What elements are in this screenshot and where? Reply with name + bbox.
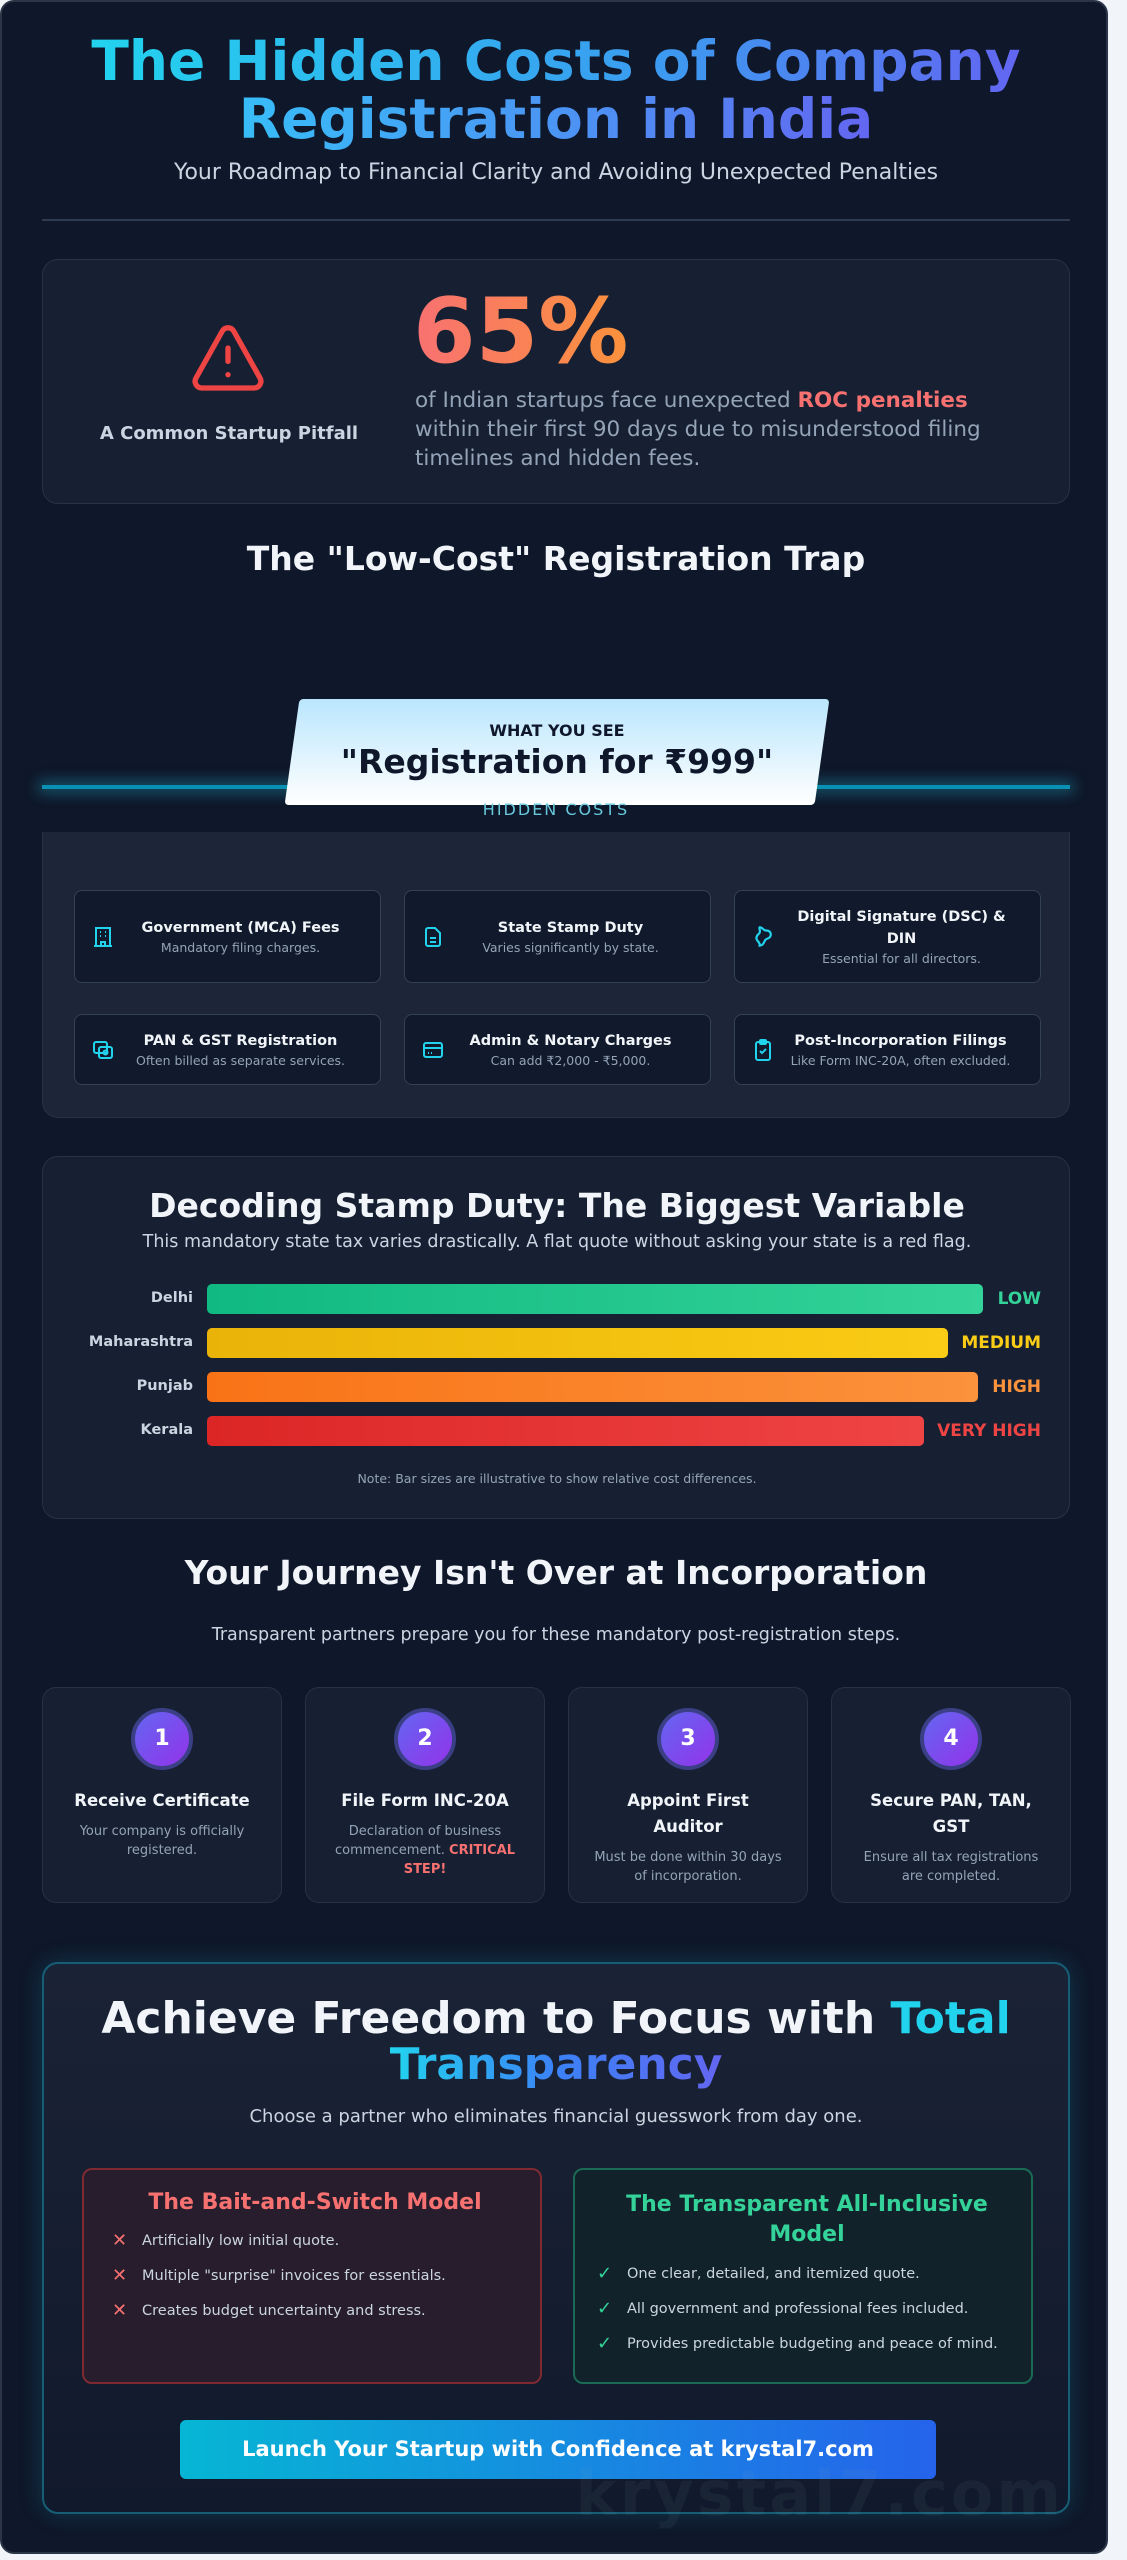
card: DSC & DIN: DIN <box>887 930 916 946</box>
subtitle: Choose a partner who eliminates financial guesswork from day one. <box>249 2106 863 2127</box>
stat number: 65% <box>413 279 628 384</box>
step 3: Appoint First Auditor <box>627 1791 749 1836</box>
box: bait and switch: The Bait-and-Switch Model <box>148 2190 482 2215</box>
stat label: A Common Startup Pitfall <box>100 423 358 444</box>
box: bait and switch: Creates budget uncertainty and stress. <box>142 2303 426 2319</box>
card: stamp duty: State Stamp Duty <box>498 920 643 936</box>
step 3: Must be done within 30 days of incorporation. <box>594 1850 782 1884</box>
box: transparent model: The Transparent All-Inclusive <box>626 2192 988 2217</box>
panel: hidden costs <box>42 832 1070 1118</box>
card: admin & notary: Can add ₹2,000 - ₹5,000. <box>491 1052 650 1068</box>
box: bait and switch <box>82 2168 542 2384</box>
box: transparent model: ✓ <box>597 2333 612 2354</box>
heading: low-cost trap: The "Low-Cost" Registration Trap <box>247 539 865 578</box>
bar chart: HIGH <box>992 1377 1041 1397</box>
step 4: Secure PAN, TAN, GST <box>870 1791 1032 1836</box>
title: Registration in India <box>239 87 873 151</box>
step 4 <box>831 1687 1071 1903</box>
step 1 <box>42 1687 282 1903</box>
bar chart: MEDIUM <box>961 1333 1041 1353</box>
step 2: File Form INC-20A <box>341 1791 509 1810</box>
card: DSC & DIN: Essential for all directors. <box>822 950 981 966</box>
card: admin & notary: Admin & Notary Charges <box>470 1032 671 1048</box>
card: DSC & DIN <box>734 890 1041 983</box>
label: hidden costs: HIDDEN COSTS <box>483 800 629 819</box>
card: stamp duty: Varies significantly by state. <box>482 940 659 954</box>
box: transparent model <box>573 2168 1033 2384</box>
main card frame: "Registration for ₹999" <box>341 742 773 781</box>
stat description: of Indian startups face unexpected ROC penalties within their first 90 days due to misunderstood filing timelines and hidden fees. <box>415 388 981 471</box>
subtitle: Your Roadmap to Financial Clarity and Avoiding Unexpected Penalties <box>174 160 938 185</box>
box: bait and switch: ✕ <box>112 2265 127 2286</box>
main card frame: WHAT YOU SEE <box>489 721 625 740</box>
card: PAN & GST: Often billed as separate services. <box>136 1052 345 1068</box>
box: bait and switch: Multiple "surprise" invoices for essentials. <box>142 2268 446 2284</box>
step 2: Declaration of business commencement. CRITICAL STEP! <box>335 1824 515 1877</box>
callout: what you see <box>285 699 829 805</box>
bar chart: VERY HIGH <box>937 1421 1041 1441</box>
bar chart <box>89 1284 1041 1446</box>
heading: journey: Your Journey Isn't Over at Incorporation <box>185 1553 927 1592</box>
box: transparent model: ✓ <box>597 2263 612 2284</box>
card: stamp duty <box>404 890 711 983</box>
subtitle: This mandatory state tax varies drastically. A flat quote without asking your state is a red flag. <box>143 1232 971 1252</box>
heading <box>101 1993 1011 2090</box>
bar chart: Punjab <box>137 1378 193 1394</box>
heading: Achieve Freedom to Focus with Total <box>101 1993 1011 2044</box>
title: The Hidden Costs of Company <box>91 29 1021 93</box>
heading: Transparency <box>390 2039 722 2090</box>
step 4: 4 <box>943 1726 959 1751</box>
bar chart: LOW <box>998 1289 1041 1309</box>
card: MCA fees: Government (MCA) Fees <box>141 920 340 936</box>
box: bait and switch: ✕ <box>112 2230 127 2251</box>
bar chart: Kerala <box>140 1422 193 1438</box>
bar chart: Delhi <box>151 1290 193 1306</box>
bar chart: Maharashtra <box>89 1334 193 1350</box>
card: post-incorporation: Post-Incorporation Filings <box>794 1032 1007 1048</box>
box: transparent model: Model <box>769 2222 845 2247</box>
glow line <box>42 785 1070 789</box>
box: transparent model: ✓ <box>597 2298 612 2319</box>
step 4: Ensure all tax registrations are completed. <box>864 1850 1038 1884</box>
card: PAN & GST <box>74 1014 381 1085</box>
box: transparent model: All government and professional fees included. <box>627 2301 968 2317</box>
box: transparent model: One clear, detailed, and itemized quote. <box>627 2266 920 2282</box>
panel: stat <box>42 259 1070 504</box>
button: CTA: Launch Your Startup with Confidence at krystal7.com <box>242 2437 874 2461</box>
step 1: 1 <box>154 1726 170 1751</box>
panel: stamp duty <box>42 1156 1070 1519</box>
note: Note: Bar sizes are illustrative to show relative cost differences. <box>357 1471 757 1486</box>
panel: total transparency <box>42 1962 1070 2514</box>
heading: Decoding Stamp Duty: The Biggest Variable <box>149 1186 965 1225</box>
step 1: Receive Certificate <box>74 1791 250 1810</box>
box: bait and switch: ✕ <box>112 2300 127 2321</box>
card: admin & notary <box>404 1014 711 1085</box>
box: bait and switch: Artificially low initial quote. <box>142 2233 339 2249</box>
card: post-incorporation <box>734 1014 1041 1085</box>
step 3 <box>568 1687 808 1903</box>
button: CTA <box>180 2420 936 2479</box>
step 1: Your company is officially registered. <box>80 1824 244 1858</box>
card: DSC & DIN: Digital Signature (DSC) & <box>797 908 1006 924</box>
card: post-incorporation: Like Form INC-20A, often excluded. <box>791 1052 1010 1068</box>
watermark: krystal7.com <box>576 2457 1064 2530</box>
card: MCA fees: Mandatory filing charges. <box>161 940 320 954</box>
card: PAN & GST: PAN & GST Registration <box>144 1032 337 1048</box>
step 3: 3 <box>680 1726 696 1751</box>
subtitle: journey: Transparent partners prepare you for these mandatory post-registration steps. <box>212 1625 900 1645</box>
card: MCA fees <box>74 890 381 983</box>
title <box>91 29 1021 151</box>
step 2: 2 <box>417 1726 433 1751</box>
step 2 <box>305 1687 545 1903</box>
box: transparent model: Provides predictable budgeting and peace of mind. <box>627 2336 998 2352</box>
icon: warning <box>192 325 264 391</box>
